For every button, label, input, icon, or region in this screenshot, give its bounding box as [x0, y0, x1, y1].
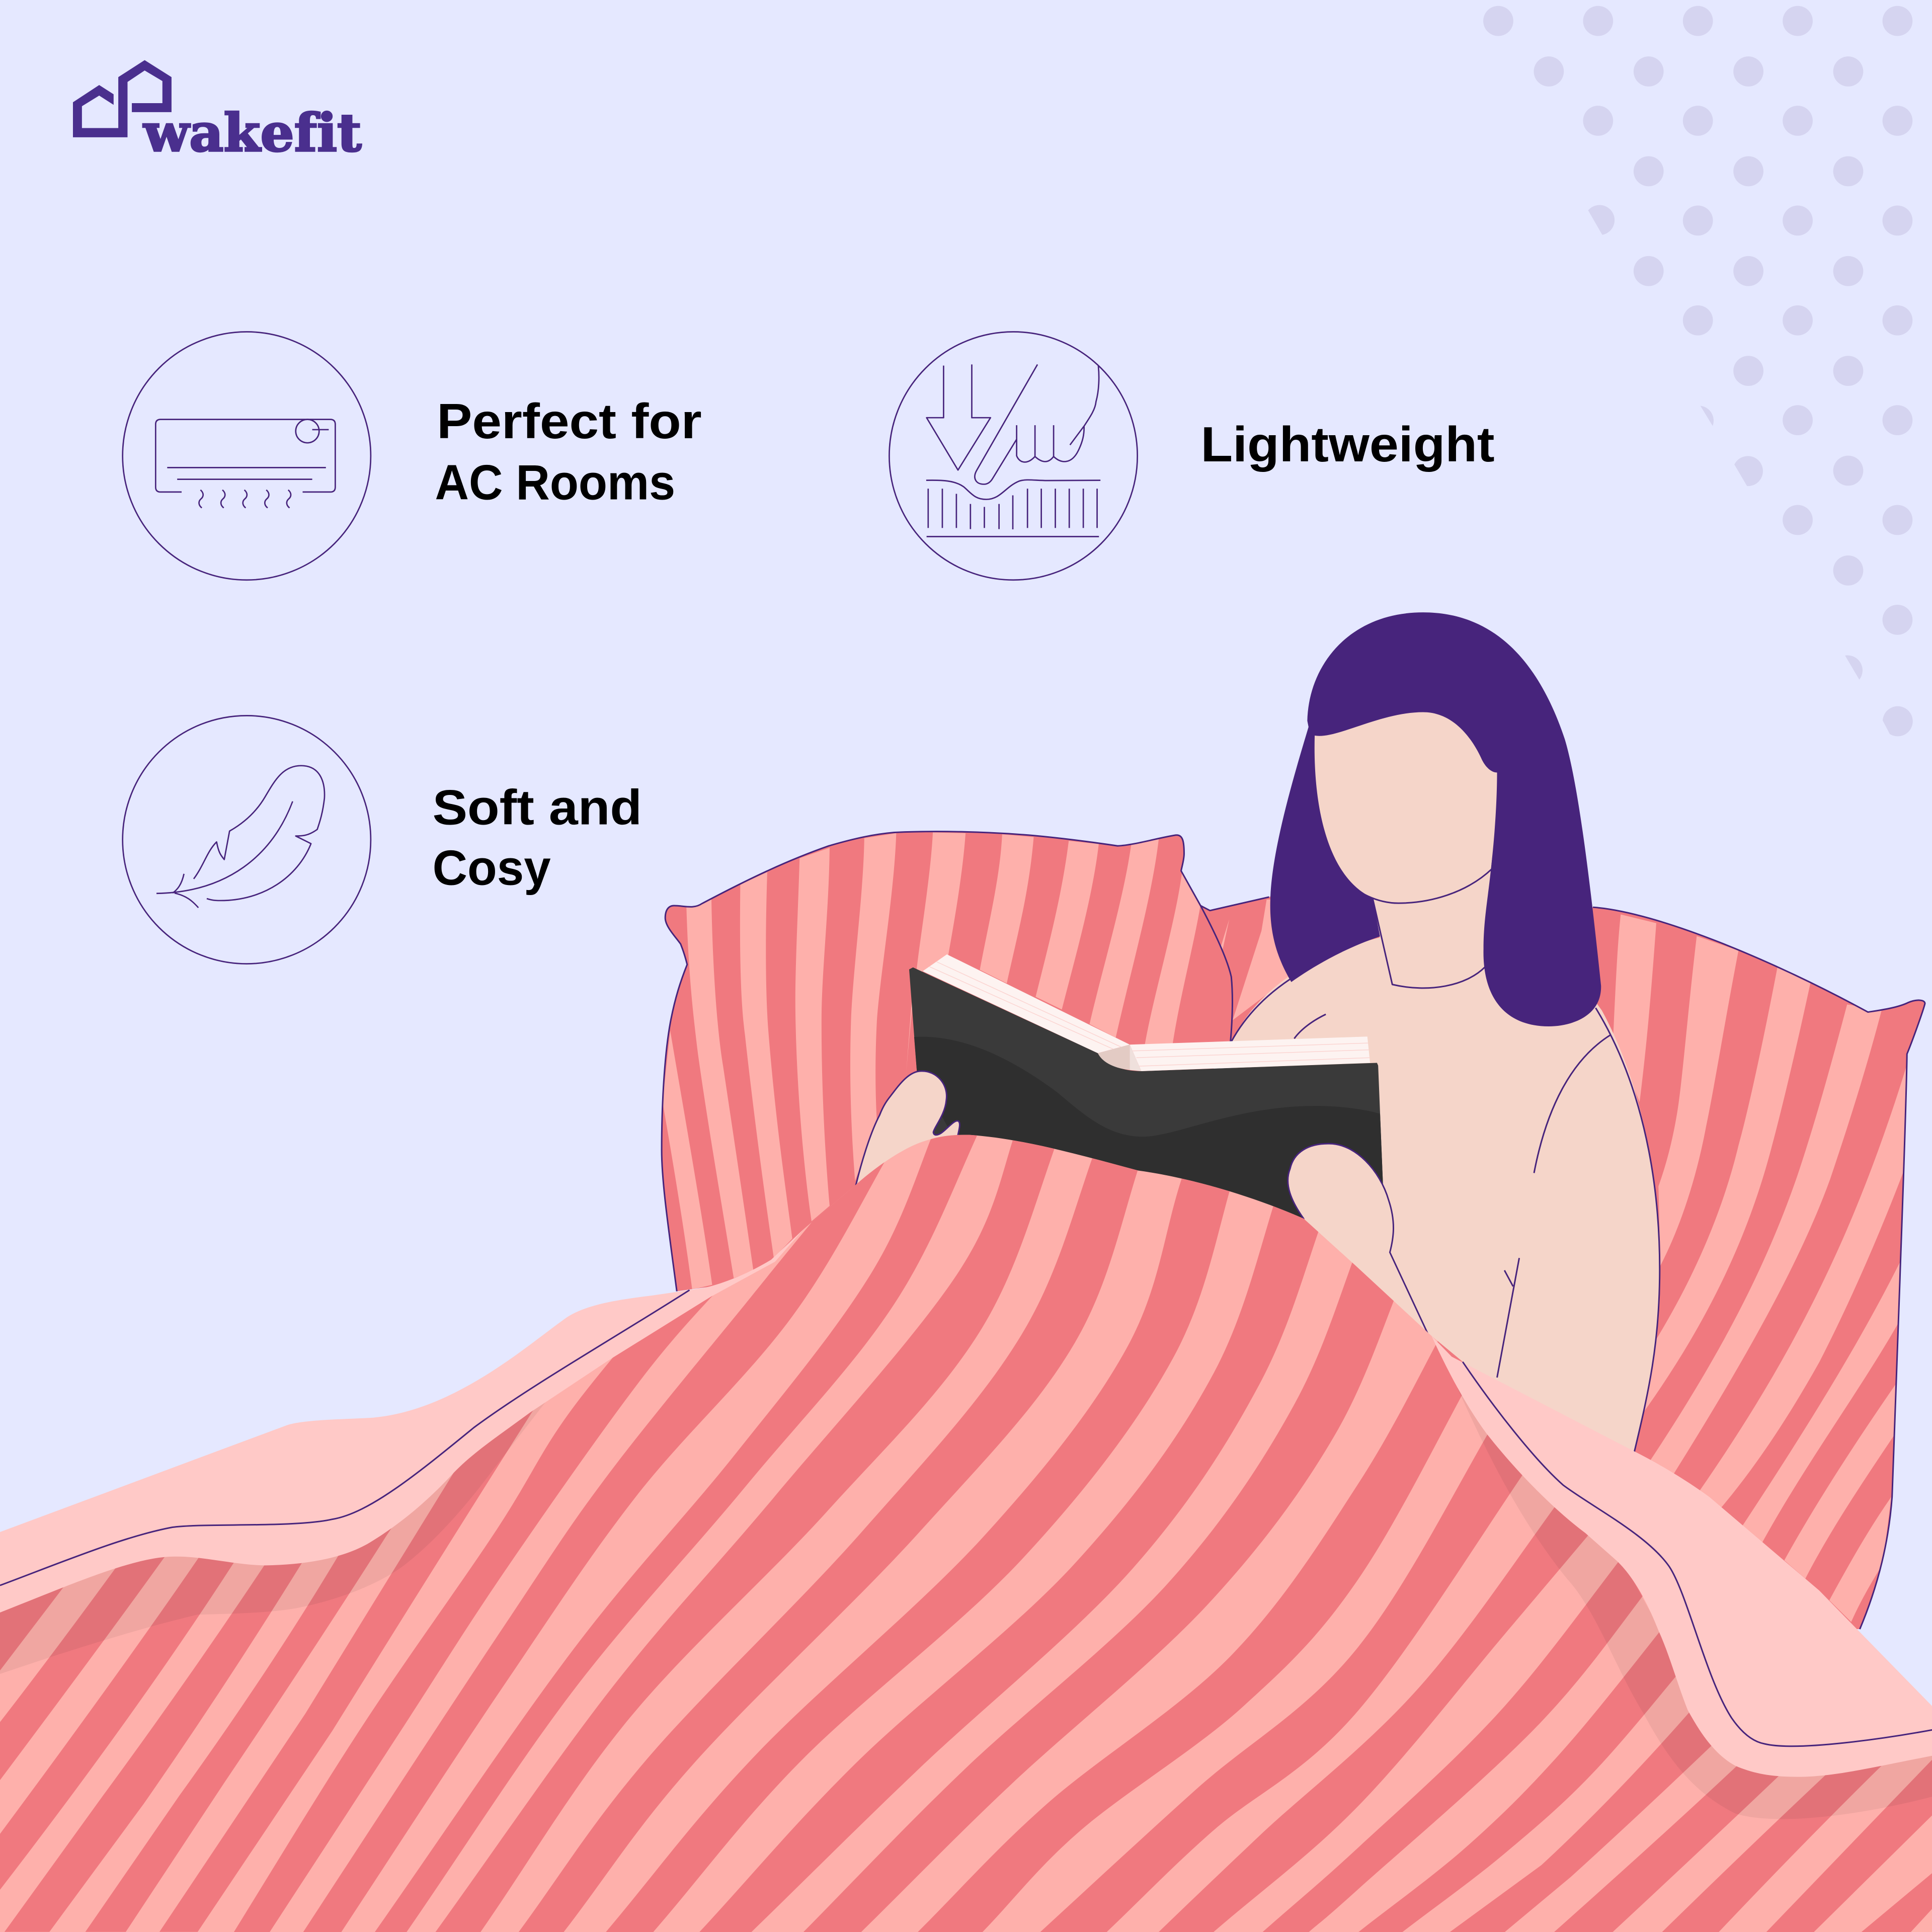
fold shadow left — [0, 1402, 546, 1674]
left hand — [856, 1071, 959, 1185]
dot pattern — [1483, 6, 1913, 736]
right pillow — [1200, 862, 1925, 1629]
icon: air conditioner — [123, 332, 371, 580]
blanket — [0, 1109, 1932, 1932]
face — [1315, 712, 1497, 903]
left pillow — [662, 832, 1232, 1292]
body outlines — [1231, 869, 1660, 1454]
woman — [1231, 612, 1660, 1454]
heading: Lightweight: Lightweight — [1201, 417, 1495, 472]
body — [1231, 862, 1660, 1454]
blanket stripes right — [1450, 1713, 1932, 1932]
blanket fold right — [1431, 1336, 1932, 1777]
logo: wakefit — [73, 60, 362, 164]
heading: Perfect for AC Rooms — [435, 393, 702, 510]
heading: Soft and Cosy — [433, 779, 642, 895]
icon: lightweight press — [889, 332, 1138, 580]
right hand — [1288, 1144, 1429, 1337]
book — [909, 954, 1383, 1223]
fold seam left — [0, 1290, 689, 1585]
hair — [1270, 612, 1601, 1026]
heading: Perfect for AC Rooms: Perfect for — [437, 393, 702, 449]
blanket stripes centre — [234, 1111, 1702, 1932]
logo: wakefit: wakefit — [143, 103, 362, 164]
blanket stripes left — [0, 1391, 548, 1932]
icon: feather — [123, 715, 371, 964]
fold shadow right — [1457, 1388, 1932, 1819]
heading: Soft and Cosy: Soft and — [433, 779, 642, 835]
blanket fold left — [0, 1229, 804, 1613]
heading: Perfect for AC Rooms: AC Rooms — [435, 454, 675, 510]
heading: Soft and Cosy: Cosy — [433, 840, 551, 895]
fold seam right — [1463, 1362, 1932, 1746]
